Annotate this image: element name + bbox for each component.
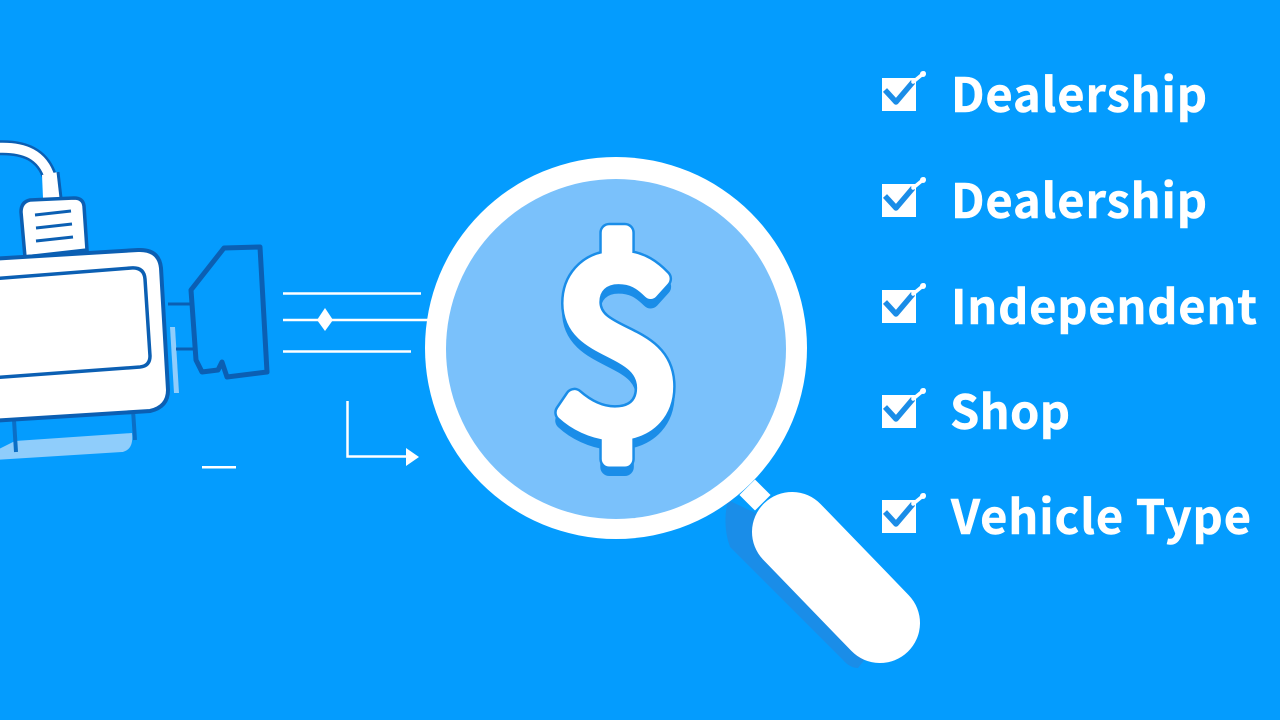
item: Independent: Independent xyxy=(951,269,1257,338)
elbow arrow xyxy=(348,401,419,466)
handle xyxy=(792,532,880,623)
magnifying glass xyxy=(425,156,880,668)
item: Vehicle Type: Vehicle Type xyxy=(950,479,1251,548)
scanner screen xyxy=(0,268,150,378)
dash xyxy=(202,466,236,468)
OBD connector xyxy=(191,247,267,377)
dollar sign: $ xyxy=(551,156,681,498)
dollar sign: $ xyxy=(551,164,681,506)
cable xyxy=(0,148,61,198)
side connector pins xyxy=(168,304,196,393)
item: Dealership second: Dealership xyxy=(951,163,1207,232)
checklist xyxy=(882,57,1257,548)
signal diamond xyxy=(317,308,333,331)
item: Shop xyxy=(882,374,1070,443)
scanner body xyxy=(0,250,168,421)
item: Dealership: Dealership xyxy=(951,57,1207,126)
signal lines xyxy=(283,294,430,352)
lower bracket xyxy=(0,410,135,460)
handle neck xyxy=(739,479,771,511)
handle shadow xyxy=(725,500,880,668)
lens glass xyxy=(446,179,786,519)
icon: OBD scanner device xyxy=(0,148,267,460)
item: Shop: Shop xyxy=(950,374,1070,443)
scanner plug xyxy=(21,198,87,257)
lens ring xyxy=(425,157,807,539)
dollar sign: $ xyxy=(551,156,681,498)
